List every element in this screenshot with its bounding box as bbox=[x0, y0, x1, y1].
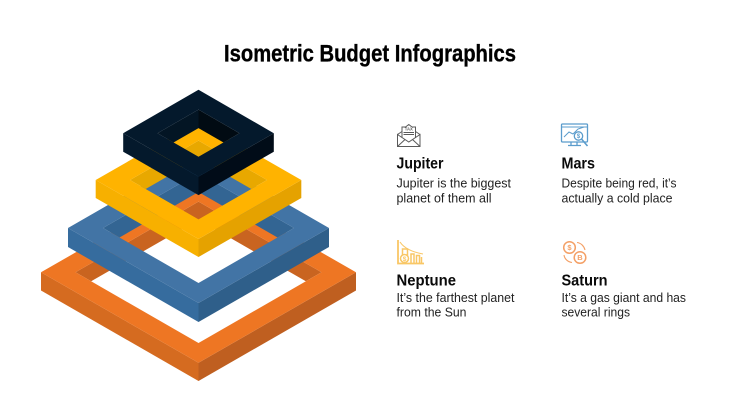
heading: Saturn: Saturn bbox=[562, 272, 608, 290]
chart: isometric stacked pyramid bbox=[41, 90, 356, 381]
layer: navy bbox=[123, 90, 274, 195]
description: Jupiter: Jupiter is the biggest bbox=[396, 176, 512, 190]
description: Jupiter: planet of them all bbox=[396, 191, 492, 205]
item: Saturn bbox=[562, 242, 686, 320]
layer: orange bbox=[41, 182, 356, 381]
heading: Mars: Mars bbox=[562, 156, 595, 172]
item: Neptune bbox=[396, 240, 515, 320]
item: Jupiter bbox=[396, 124, 512, 205]
description: Saturn: It’s a gas giant and has bbox=[562, 291, 686, 305]
layer: blue bbox=[68, 153, 329, 322]
description: Saturn bbox=[562, 291, 686, 320]
description: Neptune: It’s the farthest planet bbox=[396, 291, 515, 305]
heading: Neptune: Neptune bbox=[396, 272, 456, 290]
layer: yellow bbox=[96, 121, 301, 257]
icon: monitor with magnifier: $ bbox=[577, 134, 581, 140]
title: Isometric Budget Infographics bbox=[224, 40, 516, 68]
icon: tax envelope: TAX bbox=[405, 126, 413, 132]
description: Neptune bbox=[396, 291, 515, 320]
description: Neptune: from the Sun bbox=[396, 306, 467, 320]
description: Saturn: several rings bbox=[562, 306, 630, 320]
description: Mars: Despite being red, it’s bbox=[562, 176, 676, 190]
icon: currency exchange coins bbox=[564, 242, 586, 263]
icon: currency exchange coins: B bbox=[577, 253, 583, 262]
heading: Jupiter: Jupiter bbox=[396, 156, 444, 172]
icon: currency exchange coins: $ bbox=[567, 243, 572, 252]
description: Jupiter bbox=[396, 176, 512, 205]
description: Mars: actually a cold place bbox=[562, 191, 673, 205]
description: Mars bbox=[562, 176, 676, 205]
icon: falling bar chart with coin: $ bbox=[403, 256, 407, 263]
item: Mars bbox=[562, 124, 676, 205]
